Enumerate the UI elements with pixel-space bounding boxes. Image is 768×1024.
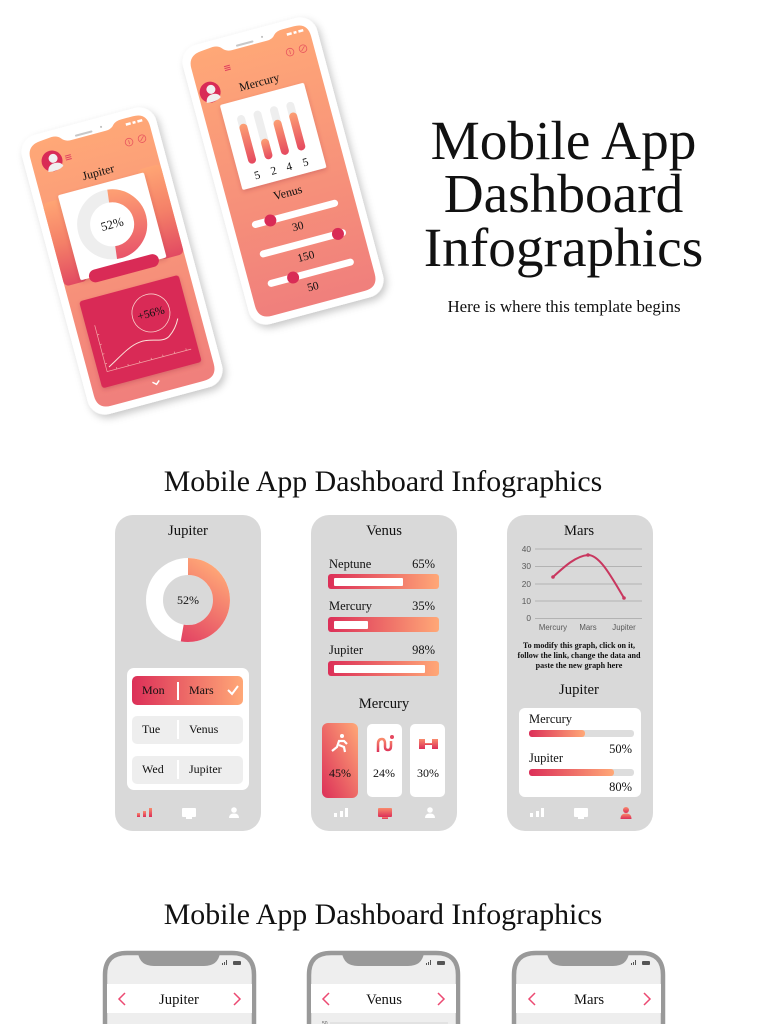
phone mockup: Jupiter bbox=[17, 103, 227, 419]
side card left bbox=[42, 197, 88, 287]
schedule card bbox=[127, 668, 249, 790]
phone frame: Venus bbox=[309, 953, 458, 1024]
progress: Jupiter bbox=[328, 643, 439, 676]
nav icon: chart bbox=[137, 808, 152, 817]
tile: route bbox=[367, 724, 402, 797]
main title: Dashboard bbox=[444, 163, 683, 224]
category labels: Jupiter bbox=[612, 623, 636, 632]
donut chart: 52% bbox=[177, 593, 199, 607]
speaker bbox=[235, 36, 264, 47]
category labels: Mars bbox=[579, 623, 597, 632]
row: Mon bbox=[132, 676, 243, 705]
bar tracks bbox=[236, 101, 306, 165]
caption: To modify this graph, click on it, bbox=[523, 641, 635, 650]
row: Tue: Venus bbox=[189, 722, 219, 736]
nav icon: monitor bbox=[182, 808, 196, 819]
screen bbox=[26, 112, 217, 409]
subtitle: Venus bbox=[272, 182, 304, 203]
progress: Mercury: Mercury bbox=[529, 712, 573, 726]
arrow left bbox=[529, 993, 535, 1005]
slider 3: 50 bbox=[306, 280, 320, 294]
progress: Jupiter: 80% bbox=[609, 780, 632, 794]
header band bbox=[516, 984, 661, 1013]
header icons bbox=[285, 44, 308, 57]
avatar bbox=[197, 79, 223, 105]
title: Jupiter bbox=[81, 161, 116, 183]
tile: dumbbell bbox=[410, 724, 445, 797]
axis labels: 40 bbox=[522, 544, 531, 554]
arrow right bbox=[234, 993, 240, 1005]
heading: Jupiter bbox=[559, 682, 599, 698]
speaker bbox=[74, 126, 103, 137]
nav icon: monitor bbox=[378, 808, 392, 819]
status icons bbox=[287, 29, 304, 36]
progress: Mercury bbox=[529, 712, 634, 756]
status icons bbox=[126, 119, 143, 126]
menu icon bbox=[224, 65, 231, 71]
status icons bbox=[222, 960, 241, 965]
heading: Jupiter bbox=[168, 523, 208, 539]
progress: Neptune: 65% bbox=[412, 557, 435, 571]
progress: Mercury: 50% bbox=[609, 742, 632, 756]
progress: Jupiter: Jupiter bbox=[529, 751, 564, 765]
header band bbox=[107, 984, 252, 1013]
phone body bbox=[17, 103, 227, 419]
slider 1: 30 bbox=[291, 220, 305, 234]
progress: Neptune: Neptune bbox=[329, 557, 372, 571]
data line bbox=[551, 553, 626, 600]
notch bbox=[138, 953, 220, 966]
title: Mars bbox=[574, 992, 604, 1008]
progress: Jupiter bbox=[529, 751, 634, 794]
bar labels: 5 bbox=[301, 156, 310, 169]
axis labels: 20 bbox=[522, 579, 531, 589]
main title: Infographics bbox=[424, 217, 703, 278]
section heading 2: Mobile App Dashboard Infographics bbox=[164, 898, 602, 931]
bar chart card bbox=[220, 83, 327, 190]
nav icon: chart bbox=[530, 808, 544, 817]
donut chart: 52% bbox=[99, 215, 125, 234]
bar labels: 5 bbox=[253, 169, 262, 182]
row: Wed: Jupiter bbox=[189, 762, 222, 776]
progress card bbox=[519, 708, 641, 797]
slider 2 bbox=[258, 226, 351, 274]
red chart card bbox=[79, 275, 202, 388]
status icons bbox=[631, 960, 650, 965]
phone mockup: Mercury bbox=[178, 13, 388, 329]
progress: Jupiter: 98% bbox=[412, 643, 435, 657]
tile: running bbox=[322, 723, 358, 798]
nav icon: chart bbox=[334, 808, 348, 817]
row: Tue bbox=[132, 716, 243, 744]
main title: Mobile App bbox=[431, 110, 696, 171]
chevron bbox=[152, 380, 160, 385]
donut chart bbox=[154, 566, 222, 634]
donut chart bbox=[77, 189, 151, 262]
arrow left bbox=[323, 993, 329, 1005]
row: Wed: Wed bbox=[142, 762, 164, 776]
heading: Mars bbox=[564, 523, 594, 539]
row: Mon: Mon bbox=[142, 683, 165, 697]
panel: Venus bbox=[311, 515, 457, 831]
header icons bbox=[124, 134, 147, 147]
axis labels bbox=[522, 544, 531, 623]
slider 2: 150 bbox=[296, 249, 316, 265]
progress: Jupiter: Jupiter bbox=[329, 643, 364, 657]
heading: Venus bbox=[366, 523, 402, 539]
bar labels: 4 bbox=[285, 161, 294, 174]
nav icon: monitor bbox=[574, 808, 588, 819]
axis labels: 30 bbox=[522, 561, 531, 571]
phone body bbox=[178, 13, 388, 329]
phone frame: Jupiter bbox=[105, 953, 254, 1024]
row: Mon: Mars bbox=[189, 683, 214, 697]
arrow right bbox=[438, 993, 444, 1005]
row: Wed bbox=[132, 756, 243, 784]
bar values bbox=[239, 110, 306, 165]
panel: Mars bbox=[507, 515, 653, 831]
title: Mercury bbox=[237, 70, 281, 94]
arrow left bbox=[119, 993, 125, 1005]
progress: Mercury: Mercury bbox=[329, 599, 373, 613]
chart start bbox=[322, 1021, 448, 1024]
screen bbox=[187, 22, 378, 319]
title: Jupiter bbox=[159, 992, 199, 1008]
slider 3 bbox=[266, 255, 359, 304]
notch bbox=[342, 953, 424, 966]
title: Venus bbox=[366, 992, 402, 1008]
heading: Mercury bbox=[359, 696, 410, 712]
nav icon: user bbox=[229, 807, 239, 818]
category labels: Mercury bbox=[539, 623, 567, 632]
row: Tue: Tue bbox=[142, 722, 160, 736]
percent callout: +56% bbox=[136, 304, 166, 323]
progress: Neptune bbox=[328, 557, 439, 589]
panel: Jupiter bbox=[115, 515, 261, 831]
donut card bbox=[58, 172, 167, 280]
axis labels: 10 bbox=[522, 596, 531, 606]
caption: paste the new graph here bbox=[536, 661, 623, 670]
avatar bbox=[39, 148, 65, 174]
axes bbox=[95, 303, 191, 372]
tile: running: 45% bbox=[329, 766, 351, 780]
header band bbox=[311, 984, 456, 1013]
arrow right bbox=[644, 993, 650, 1005]
subtitle: Here is where this template begins bbox=[447, 297, 681, 316]
bar labels bbox=[253, 156, 310, 182]
notch bbox=[547, 953, 629, 966]
progress: Mercury bbox=[328, 599, 439, 632]
category labels bbox=[539, 623, 636, 632]
nav icon: user bbox=[425, 807, 435, 818]
trend line bbox=[101, 319, 185, 367]
nav icon: user bbox=[620, 807, 632, 819]
tile: dumbbell: 30% bbox=[417, 766, 439, 780]
menu icon bbox=[65, 155, 72, 160]
line chart bbox=[522, 544, 642, 632]
tile: route: 24% bbox=[373, 766, 395, 780]
section heading 1: Mobile App Dashboard Infographics bbox=[164, 465, 602, 498]
status icons bbox=[426, 960, 445, 965]
axis labels: 0 bbox=[526, 613, 531, 623]
phone frame: Mars bbox=[514, 953, 663, 1024]
progress: Mercury: 35% bbox=[412, 599, 435, 613]
slider 1 bbox=[250, 197, 343, 244]
red pill bbox=[87, 253, 160, 284]
side card right bbox=[137, 164, 184, 260]
caption: follow the link, change the data and bbox=[518, 651, 641, 660]
bar labels: 2 bbox=[269, 165, 278, 178]
